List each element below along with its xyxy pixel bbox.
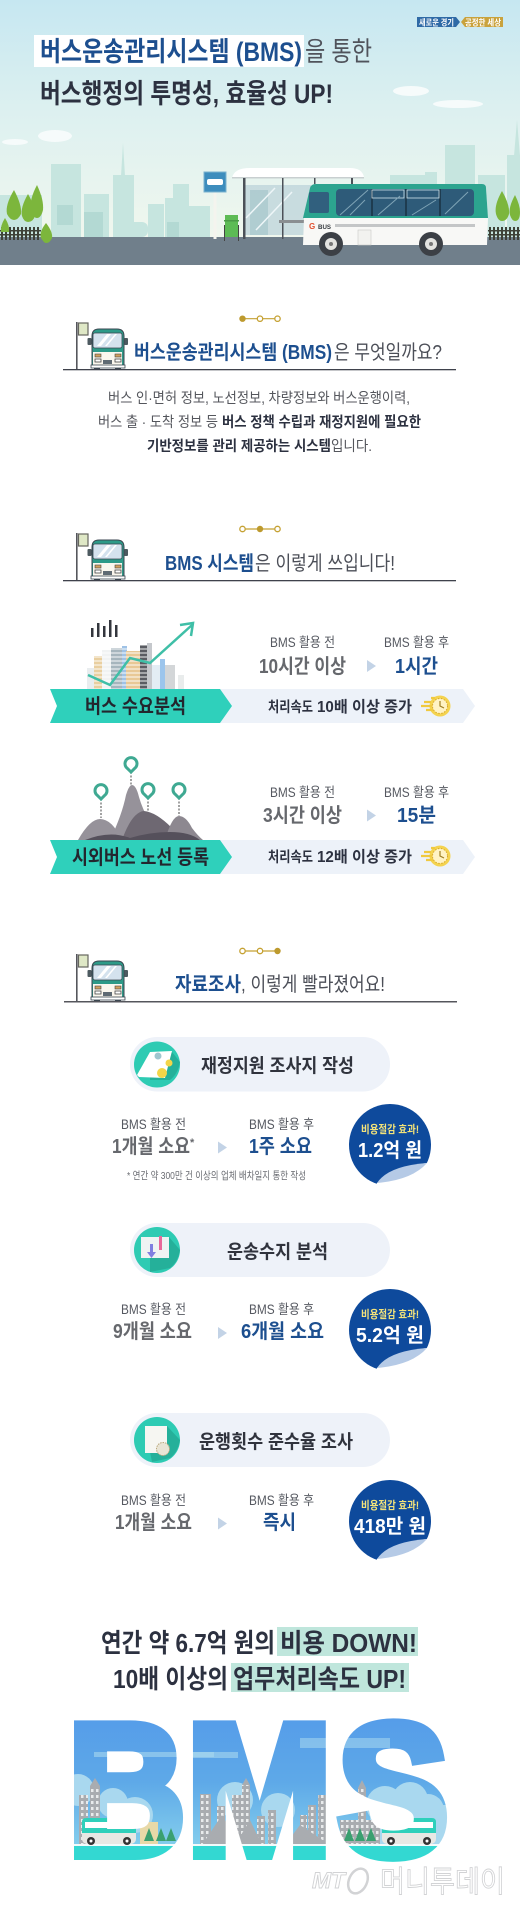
savings badge: 418만 원 (354, 1515, 426, 1538)
savings badge (349, 1480, 433, 1566)
before label: BMS 활용 전 (270, 785, 335, 800)
badge: government slogan tag (417, 17, 503, 28)
trees (1, 185, 520, 243)
section 2 heading: 은 이렇게 쓰입니다! (255, 552, 395, 575)
panel: intercity bus route registration (50, 758, 475, 874)
savings badge (349, 1289, 433, 1375)
buildings (79, 1785, 380, 1845)
icon: city with rising chart (87, 620, 193, 689)
pill heading (130, 1223, 390, 1277)
section 2 bus icon (76, 533, 128, 581)
category ribbon (50, 689, 232, 723)
watermark: 머니투데이 logo (312, 1865, 505, 1899)
title: 버스행정의 투명성, 효율성 UP! (40, 79, 333, 109)
section 3 heading: 자료조사 (175, 973, 241, 996)
badge: government slogan tag: 새로운 경기 (419, 18, 454, 28)
ground (60, 1844, 460, 1846)
panel: transport income analysis (113, 1223, 433, 1375)
panel: bus demand analysis (50, 620, 475, 723)
pill heading (130, 1037, 390, 1092)
body text: 버스 인·면허 정보, 노선정보, 차량정보와 버스운행이력, (108, 390, 410, 407)
right bus (382, 1818, 436, 1845)
bus (303, 184, 488, 256)
footnote: * 연간 약 300만 건 이상의 업체 배차일지 통한 작성 (127, 1169, 306, 1182)
trash bin (224, 215, 239, 241)
section 2 heading (63, 552, 456, 581)
before value: 1개월 소요 (115, 1511, 192, 1534)
section 1 progress dots (239, 316, 280, 322)
fence left (0, 227, 41, 240)
section 3 bus icon (76, 954, 128, 1002)
body text: 버스 정책 수립과 재정지원에 필요한 (222, 414, 421, 431)
after value: 15분 (397, 805, 436, 827)
speed ribbon (220, 840, 475, 874)
panel: service frequency compliance survey (115, 1413, 433, 1566)
bus: G (309, 222, 315, 231)
section 1 heading: 은 무엇일까요? (334, 341, 442, 364)
section 3 progress dots (240, 948, 281, 954)
watermark: 머니투데이 logo: MT (312, 1868, 347, 1893)
savings badge: 비용절감 효과! (361, 1122, 419, 1136)
panel: financial support survey (112, 1037, 433, 1190)
body text: 버스 출 · 도착 정보 등 (98, 414, 218, 431)
section 3 heading: , 이렇게 빨라졌어요! (241, 973, 385, 996)
after label: BMS 활용 후 (384, 635, 449, 650)
section 3 heading (64, 973, 457, 1002)
after value: 6개월 소요 (241, 1320, 324, 1343)
title: 을 통한 (305, 37, 372, 67)
clouds (2, 86, 483, 145)
closing headline (101, 1627, 418, 1694)
section 1 bus icon (76, 322, 128, 370)
pill heading: 재정지원 조사지 작성 (201, 1055, 354, 1077)
body text: 기반정보를 관리 제공하는 시스템 (147, 438, 331, 455)
after value: 1주 소요 (249, 1136, 312, 1158)
before label: BMS 활용 전 (121, 1117, 186, 1132)
speed ribbon: 10배 이상 증가 (317, 698, 412, 716)
panel: hero bus stop scene (0, 0, 520, 265)
after label: BMS 활용 후 (249, 1493, 314, 1508)
pill heading (130, 1413, 390, 1467)
arrow (218, 1518, 227, 1530)
after value: 즉시 (263, 1512, 296, 1534)
watermark: 머니투데이 logo: 머니투데이 (380, 1866, 505, 1899)
icon: mountains with pins (78, 758, 203, 840)
title: 버스운송관리시스템 (BMS) (40, 37, 302, 67)
arrow (218, 1327, 227, 1339)
before label: BMS 활용 전 (121, 1493, 186, 1508)
category ribbon: 시외버스 노선 등록 (72, 846, 209, 869)
shelter (232, 168, 364, 239)
bus stop sign (204, 172, 226, 239)
closing headline: 연간 약 6.7억 원의 (101, 1628, 275, 1658)
before value: 10시간 이상 (259, 655, 346, 678)
fence right (488, 227, 520, 240)
skyline (0, 120, 520, 237)
closing headline: 업무처리속도 UP! (233, 1664, 406, 1694)
icon: fast clock (421, 846, 450, 866)
section 2 progress dots (240, 526, 280, 532)
before label: BMS 활용 전 (121, 1302, 186, 1317)
left bus (82, 1818, 136, 1845)
bus: BUS (318, 224, 332, 231)
clouds (62, 1738, 450, 1845)
speed ribbon: 처리속도 (268, 849, 313, 866)
before value: 3시간 이상 (263, 804, 342, 827)
category ribbon: 버스 수요분석 (85, 695, 186, 718)
savings badge (349, 1104, 433, 1190)
section 2 heading: BMS 시스템 (165, 552, 254, 575)
before value: 1개월 소요 (112, 1135, 190, 1158)
trees (144, 1828, 376, 1841)
savings badge: 비용절감 효과! (361, 1498, 419, 1512)
badge: government slogan tag: 공정한 세상 (465, 18, 501, 28)
savings badge: 5.2억 원 (356, 1324, 424, 1347)
after label: BMS 활용 후 (384, 785, 449, 800)
body text (98, 390, 421, 455)
section 1 heading: 버스운송관리시스템 (BMS) (134, 341, 332, 364)
after value: 1시간 (395, 655, 438, 678)
arrow (367, 810, 376, 822)
before value: 9개월 소요 (113, 1320, 192, 1343)
road (0, 237, 520, 265)
after label: BMS 활용 후 (249, 1117, 314, 1132)
pill heading: 운송수지 분석 (227, 1241, 328, 1263)
speed ribbon: 12배 이상 증가 (317, 848, 412, 866)
savings badge: 1.2억 원 (358, 1139, 422, 1162)
title (34, 35, 372, 109)
savings badge: 비용절감 효과! (361, 1307, 419, 1321)
BMS city lettering (74, 1718, 448, 1862)
speed ribbon (220, 689, 475, 723)
arrow (218, 1142, 227, 1154)
speed ribbon: 처리속도 (268, 699, 313, 716)
after label: BMS 활용 후 (249, 1302, 314, 1317)
closing headline: 비용 DOWN! (280, 1628, 417, 1658)
section 1 heading (63, 341, 456, 370)
before label: BMS 활용 전 (270, 635, 335, 650)
before value: * (190, 1137, 195, 1149)
icon: fast clock (421, 696, 450, 716)
closing headline: 10배 이상의 (113, 1664, 228, 1694)
category ribbon (50, 840, 232, 874)
arrow (367, 660, 376, 672)
body text: 입니다. (331, 438, 372, 455)
pill heading: 운행횟수 준수율 조사 (199, 1431, 353, 1453)
